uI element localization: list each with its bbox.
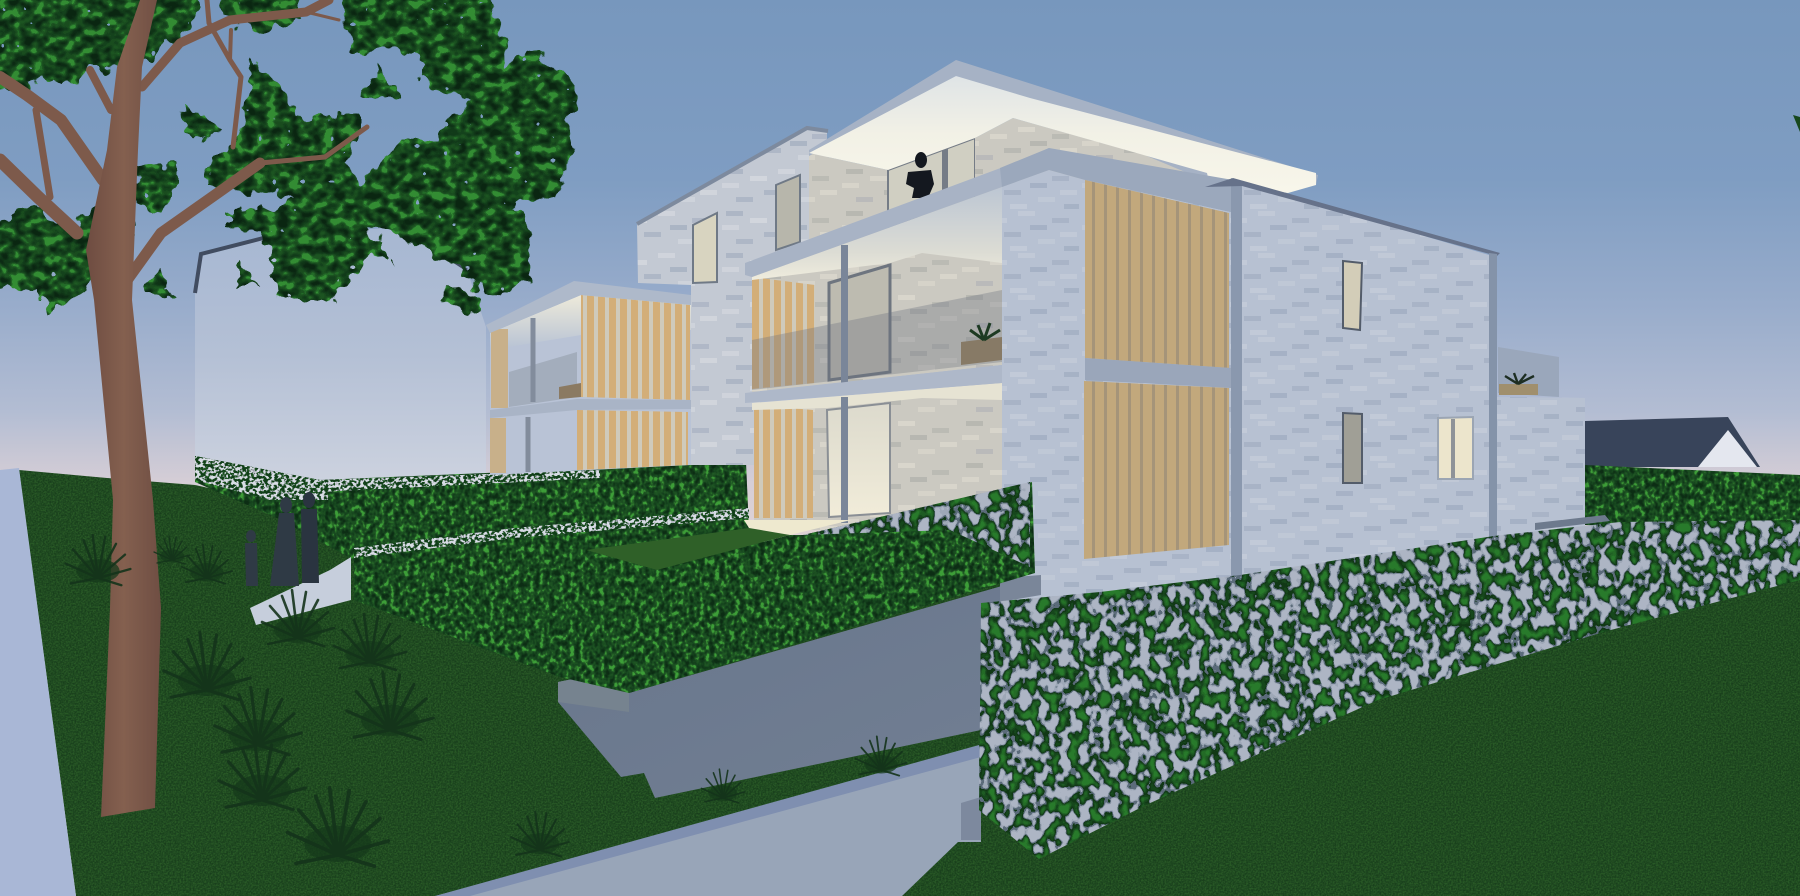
roof soffit glow — [809, 76, 1316, 193]
upper balcony slats — [752, 277, 815, 389]
family silhouettes and steps — [245, 492, 351, 625]
left wing planter — [559, 383, 581, 399]
right back hedge — [1585, 465, 1800, 535]
left footpath — [0, 468, 76, 896]
annex planter — [1499, 373, 1538, 395]
upper floor walls — [752, 187, 1002, 392]
left wing columns — [528, 318, 533, 472]
side window lower — [1343, 413, 1362, 483]
left wing side wood strip upper — [491, 329, 508, 408]
distant white building, left — [195, 227, 486, 482]
lit terrace floor — [744, 520, 851, 535]
stray leaf at right edge — [1793, 115, 1800, 132]
ground floor column — [841, 397, 848, 523]
corner pier — [1002, 170, 1231, 620]
annex upper wall — [1498, 347, 1559, 397]
annex plinth — [1535, 515, 1610, 530]
roof slab edge — [809, 60, 1318, 185]
paved walkway — [435, 745, 981, 896]
upper floor door — [829, 265, 890, 380]
lit side window — [1438, 417, 1473, 479]
mottled hedge top, courtyard — [803, 482, 1030, 567]
right annex wall — [1497, 397, 1585, 550]
left wing floor slab — [490, 399, 691, 418]
pier base — [1000, 575, 1041, 602]
mottled top edge of back hedge — [320, 470, 600, 492]
left wing soffit — [490, 295, 691, 350]
first floor soffit glow — [752, 383, 1002, 410]
grass tufts — [66, 535, 906, 866]
figure on terrace — [906, 152, 934, 198]
planter box upper — [961, 323, 1002, 365]
foliage masses — [0, 0, 576, 315]
front hedge — [979, 520, 1800, 859]
floor band — [1085, 358, 1231, 388]
speckled strip on lower hedge — [354, 508, 749, 558]
left wing roof — [486, 281, 691, 333]
main building — [486, 60, 1610, 620]
lit window mullion — [1451, 419, 1455, 478]
upper balcony slab — [745, 148, 1049, 277]
left wing side wood strip lower — [490, 418, 506, 473]
side wall — [1242, 183, 1489, 600]
top floor right brick — [975, 118, 1209, 205]
top floor recessed wall — [809, 153, 888, 260]
branches — [0, 0, 367, 297]
top floor window mullion — [942, 148, 948, 207]
ground floor walls — [754, 383, 1002, 530]
left wing interior — [490, 300, 691, 475]
stepped hedge band — [354, 482, 1035, 693]
left wing lower slats — [577, 410, 688, 470]
ground floor door — [827, 403, 890, 517]
upper column — [841, 245, 848, 387]
side window upper — [1343, 261, 1362, 330]
terrace grass — [586, 528, 790, 570]
ground floor slats — [754, 405, 813, 518]
trunk — [86, 0, 161, 817]
left wing pier — [691, 285, 734, 463]
pier cap band — [1000, 148, 1233, 212]
grey vertical fin — [1231, 178, 1242, 600]
left wing upper slats — [581, 295, 690, 400]
rear brick block — [637, 127, 827, 465]
neighbouring house, right — [1585, 417, 1760, 467]
mottled left end of back hedge — [195, 456, 330, 500]
upper timber screen — [1085, 180, 1229, 368]
retaining wall — [558, 575, 1041, 798]
lower timber screen — [1084, 381, 1229, 559]
top floor window — [888, 138, 975, 225]
left wing glass balcony — [509, 352, 577, 407]
right edge fin — [1489, 253, 1497, 560]
slim window rear block — [776, 175, 800, 250]
back hedge, left — [195, 456, 749, 560]
rear block parapet — [637, 128, 828, 224]
glass balustrade — [752, 290, 1002, 390]
upper window rear block — [693, 213, 717, 283]
lawn ground — [19, 470, 1800, 896]
side wall parapet — [1205, 178, 1500, 256]
first floor slab — [745, 365, 1002, 403]
upper balcony soffit — [752, 187, 1002, 280]
